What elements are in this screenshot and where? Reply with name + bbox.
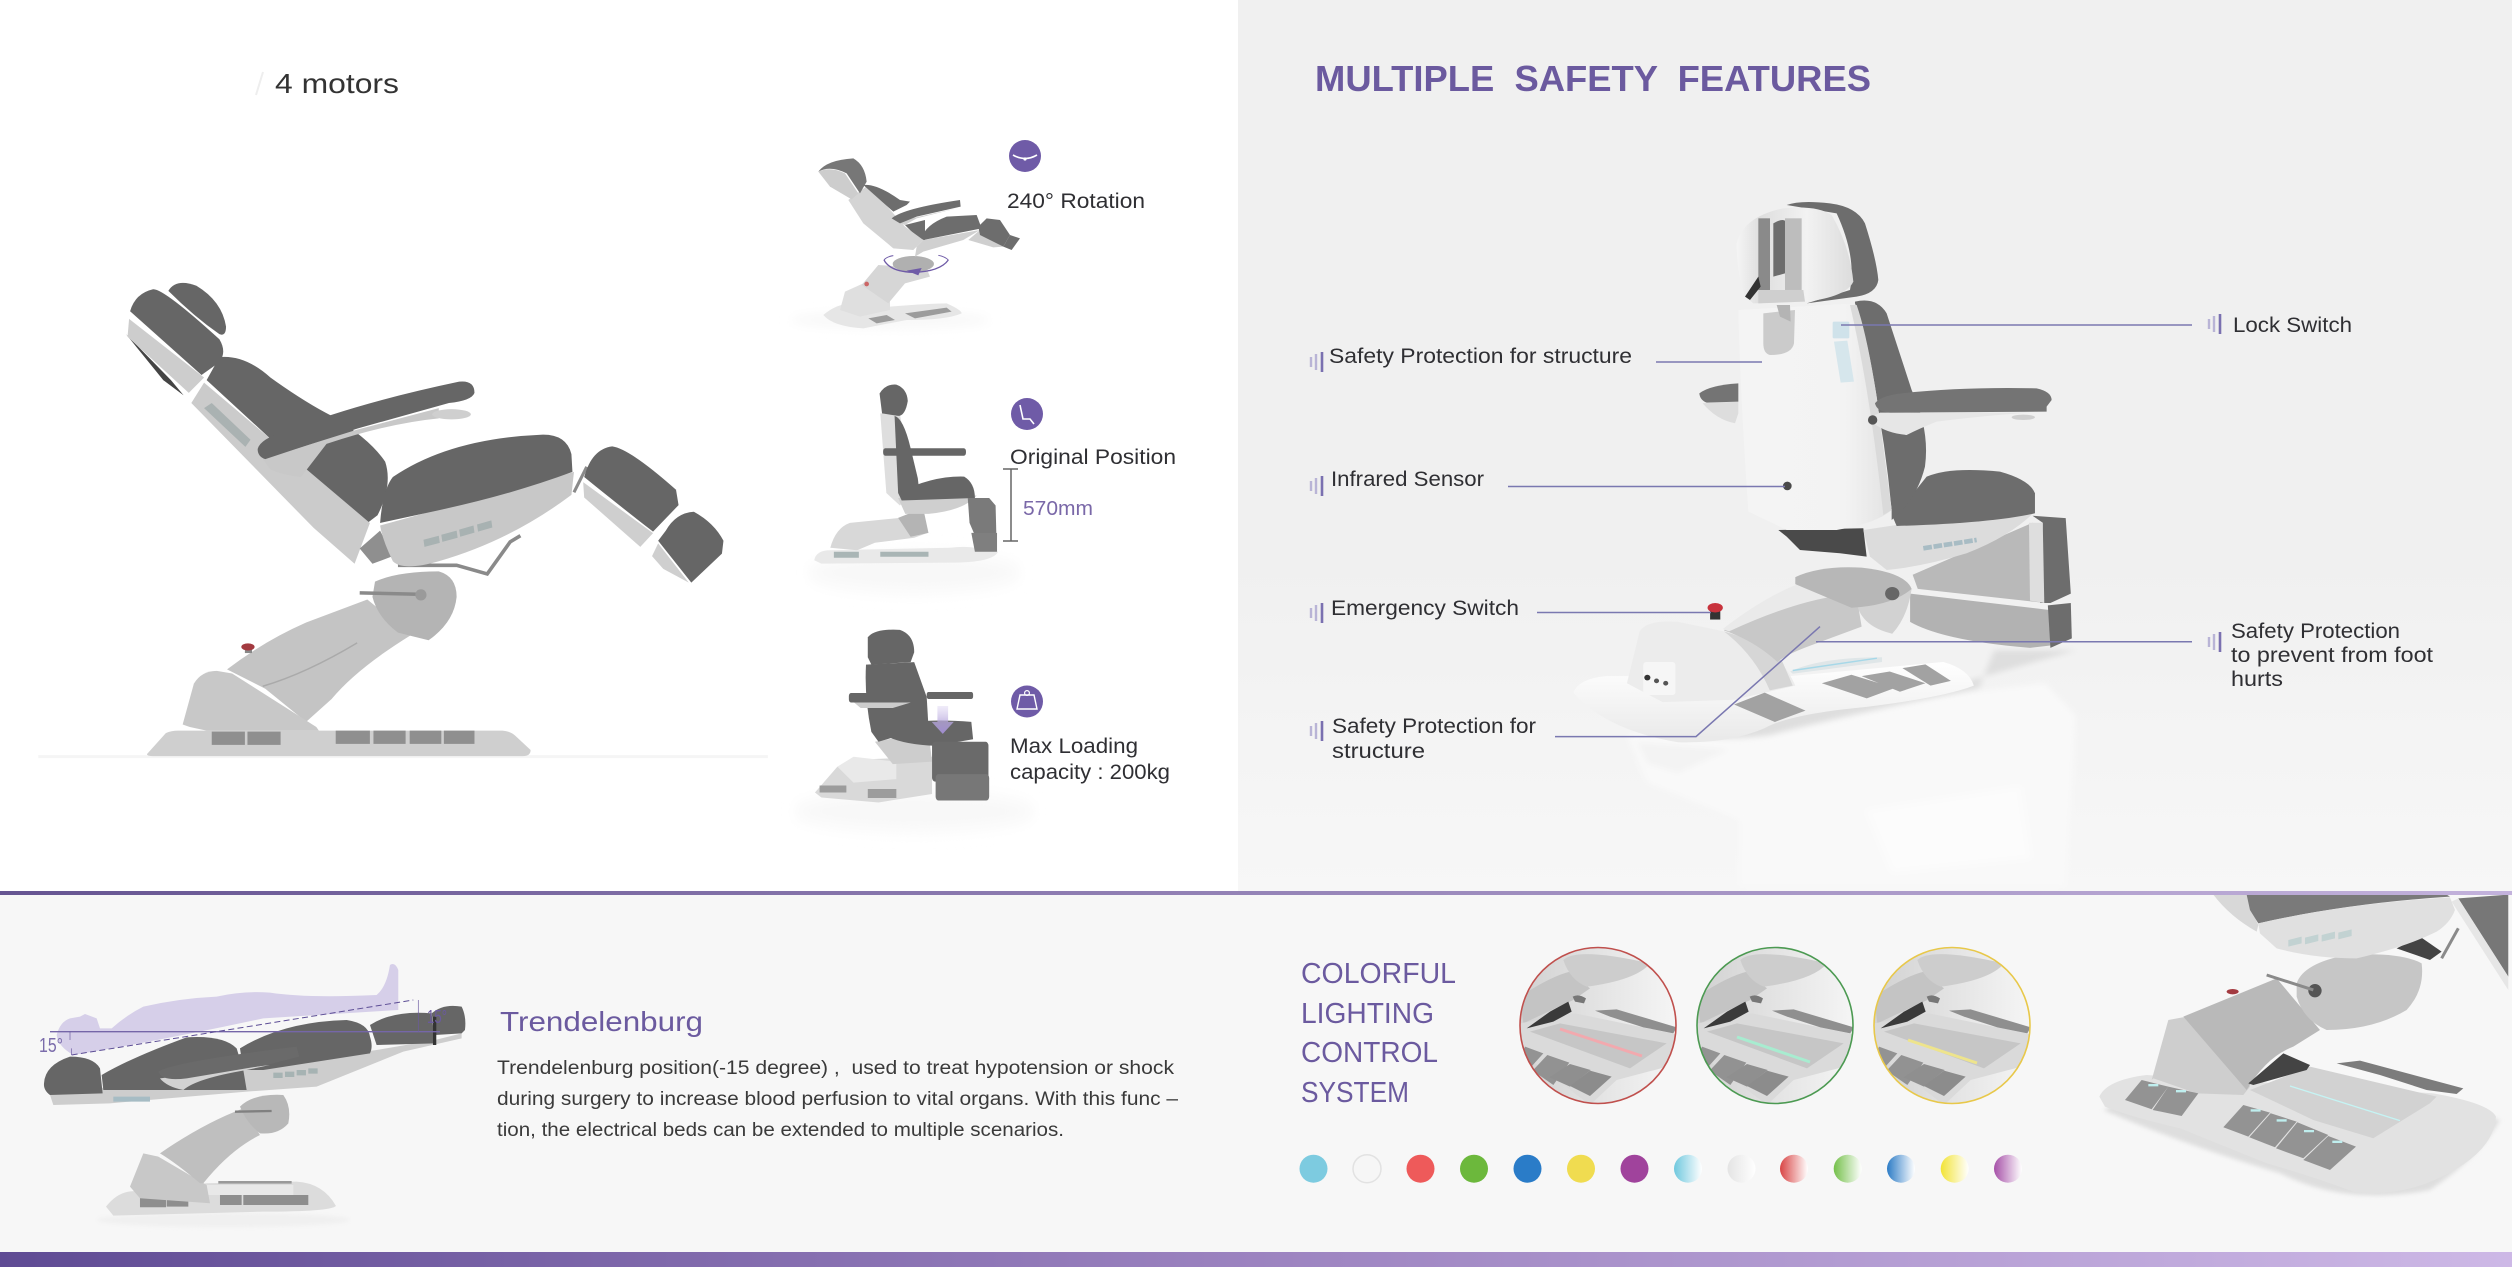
label: foot protection: hurts: [2231, 668, 2283, 691]
label: foot protection: [2231, 620, 2433, 691]
label: foot protection: to prevent from foot: [2231, 644, 2433, 667]
label: max loading: [1010, 735, 1170, 784]
icon: rotation: [1009, 140, 1041, 172]
label: safety protection for structure two lines: [1332, 715, 1536, 763]
heading: colorful lighting control system: [1301, 958, 1456, 1109]
label: lock switch: Lock Switch: [2233, 314, 2352, 337]
small chair: max loading: [793, 630, 1036, 831]
heading: colorful lighting control system: COLORFUL: [1301, 958, 1456, 990]
heading: colorful lighting control system: SYSTEM: [1301, 1077, 1409, 1109]
lighting circle green: [1696, 946, 1854, 1104]
floor reflection: [1627, 683, 2076, 886]
dimension bracket: 570mm: 570mm: [1023, 498, 1093, 520]
icon: weight: [1011, 686, 1043, 718]
small chair: rotation: [790, 158, 1020, 328]
label: max loading: Max Loading: [1010, 735, 1138, 758]
label: infrared sensor: Infrared Sensor: [1331, 468, 1484, 491]
body silhouette: [57, 964, 398, 1055]
leader lines: [1508, 325, 2192, 737]
label: max loading: capacity : 200kg: [1010, 761, 1170, 784]
panel: multiple safety features: [1238, 0, 2512, 891]
marker bars: [1311, 314, 2220, 741]
heading: trendelenburg: Trendelenburg: [500, 1006, 703, 1037]
title: MULTIPLE SAFETY FEATURES: [1315, 58, 1871, 99]
label: 240 rotation: 240° Rotation: [1007, 190, 1145, 213]
label: original position: Original Position: [1010, 446, 1176, 469]
trendelenburg chair diagram: [44, 964, 465, 1227]
label: foot protection: Safety Protection: [2231, 620, 2400, 643]
right chair lower section: [1573, 516, 2076, 742]
lighting circle red: [1519, 946, 1677, 1104]
purple rule: [0, 891, 2512, 895]
angle guides: [50, 1030, 440, 1034]
chair base close-up: [2099, 895, 2508, 1196]
label: safety protection for structure two lines: Safety Protection for: [1332, 715, 1536, 738]
label: safety protection for structure two lines: structure: [1332, 740, 1425, 763]
dimension bracket: 570mm: [1003, 469, 1093, 541]
label: emergency switch: Emergency Switch: [1331, 597, 1519, 620]
icon: original position: [1011, 398, 1043, 430]
right chair upper section: [1699, 202, 2052, 570]
colour swatches: [1300, 1155, 2022, 1183]
heading: 4 motors: 4 motors: [275, 68, 399, 99]
panel: bottom strip: [0, 895, 2512, 1252]
label: safety protection for structure: Safety Protection for structure: [1329, 345, 1632, 368]
small chair: original position: [807, 384, 1021, 593]
body text: Trendelenburg position(-15 degree) , used to treat hypotension or shock: [497, 1058, 1175, 1079]
lighting circle yellow: [1873, 946, 2031, 1104]
bottom colour band: [0, 1252, 2512, 1267]
heading: colorful lighting control system: LIGHTING: [1301, 998, 1434, 1030]
body text: [497, 1058, 1178, 1141]
body text: tion, the electrical beds can be extended to multiple scenarios.: [497, 1120, 1064, 1141]
body text: during surgery to increase blood perfusion to vital organs. With this func –: [497, 1089, 1178, 1110]
angle label left: 15°: [39, 1035, 63, 1057]
main chair side view: [38, 283, 768, 758]
heading: colorful lighting control system: CONTROL: [1301, 1037, 1438, 1069]
angle label right: 15°: [427, 1007, 447, 1027]
panel: motors and positions: [38, 68, 1176, 831]
